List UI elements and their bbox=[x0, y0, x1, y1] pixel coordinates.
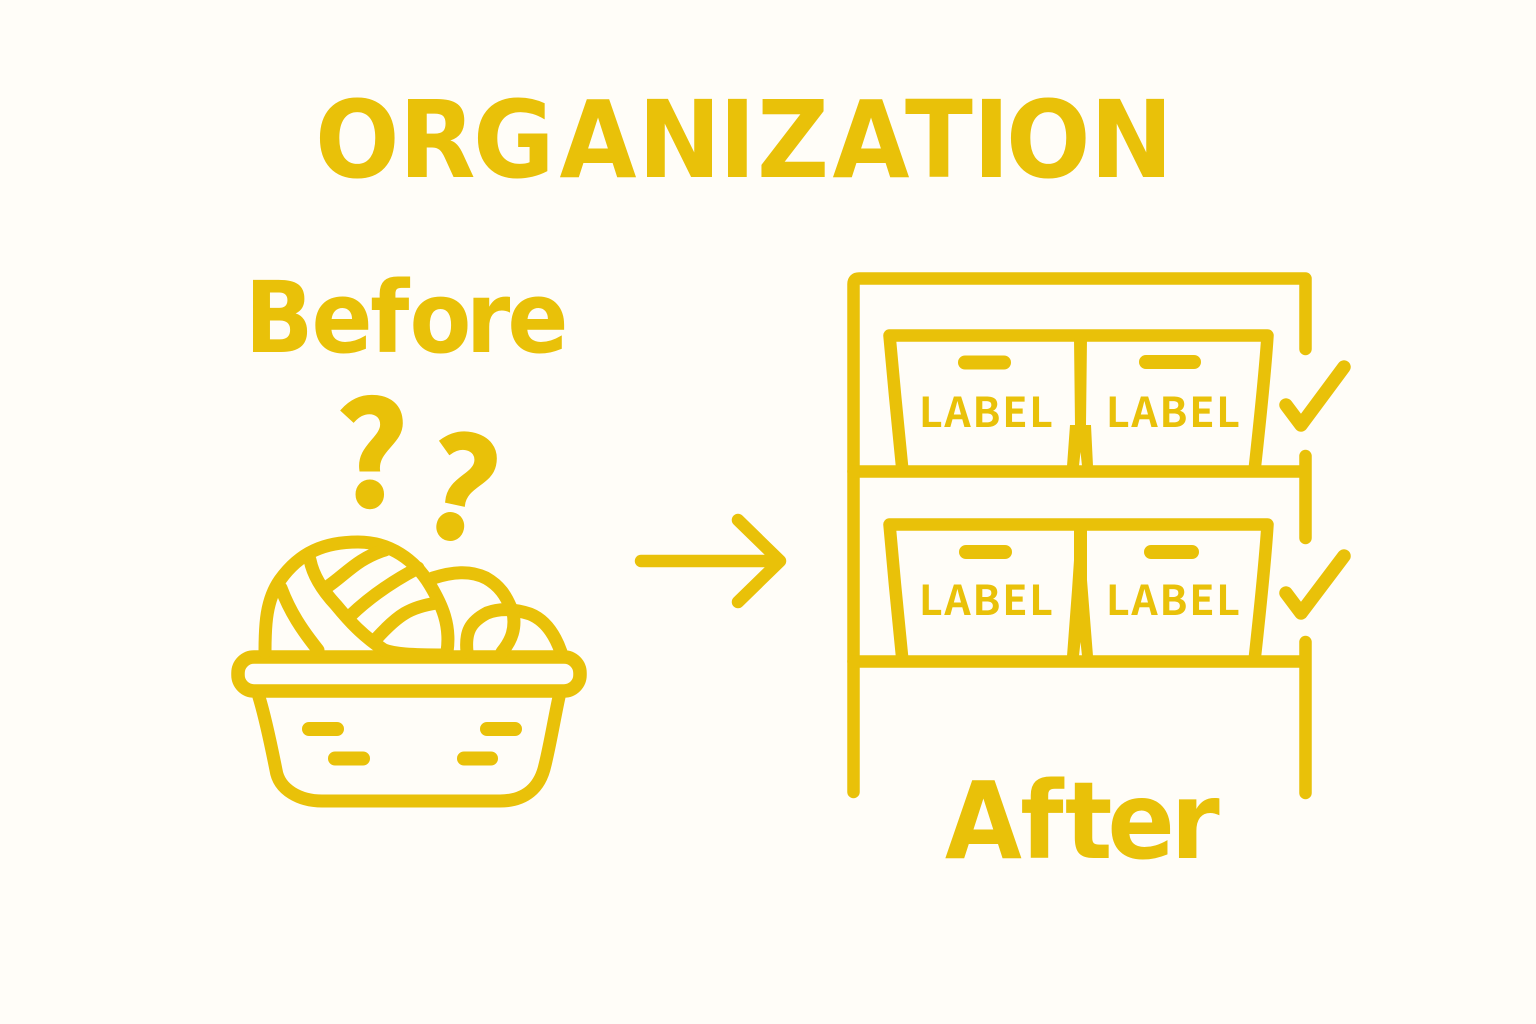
heading: after: After bbox=[945, 760, 1220, 884]
basket body bbox=[259, 697, 559, 801]
storage boxes: top row: LABEL bbox=[919, 379, 1053, 439]
pile of yarn and clothes bbox=[265, 542, 561, 655]
shelf frame bbox=[854, 278, 1306, 792]
icon: question marks: ? bbox=[336, 341, 408, 547]
storage boxes: bottom row bbox=[890, 524, 1268, 656]
icon: top check mark bbox=[1286, 367, 1344, 425]
icon: question marks bbox=[336, 341, 518, 585]
storage boxes: bottom row: LABEL bbox=[1106, 567, 1240, 627]
icon: bottom check mark bbox=[1286, 556, 1344, 613]
basket rim bbox=[238, 657, 580, 691]
lower shelf bbox=[854, 642, 1306, 793]
upper shelf bbox=[854, 456, 1306, 538]
storage boxes: top row: LABEL bbox=[1106, 379, 1240, 439]
heading: before: Before bbox=[245, 261, 569, 376]
title: ORGANIZATION bbox=[315, 79, 1173, 203]
storage boxes: top row bbox=[890, 336, 1268, 466]
storage boxes: bottom row: LABEL bbox=[919, 567, 1053, 627]
shelf unit bbox=[854, 278, 1306, 793]
icon: messy laundry basket bbox=[238, 542, 580, 801]
basket slots bbox=[309, 729, 515, 758]
icon: question marks: ? bbox=[407, 374, 518, 585]
arrow bbox=[641, 520, 780, 602]
